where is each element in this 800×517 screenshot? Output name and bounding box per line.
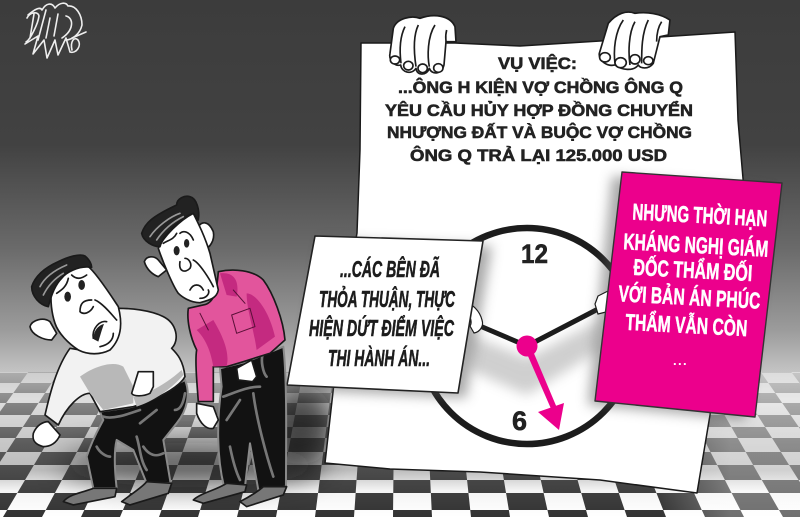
card text: ...	[673, 353, 688, 368]
shirt shading	[80, 364, 183, 410]
signature	[25, 3, 86, 58]
trousers	[218, 347, 286, 490]
hanging hand	[197, 403, 218, 429]
sheet text: case description: YÊU CẦU HỦY HỢP ĐỒNG CHUYỂN	[385, 101, 693, 120]
left ear	[144, 257, 167, 277]
eyes	[174, 246, 180, 255]
character: right man in pink shirt	[142, 196, 287, 507]
facial features	[57, 275, 117, 347]
hair streaks	[40, 265, 67, 295]
paper sheet	[325, 32, 744, 493]
shirt shading	[197, 273, 275, 367]
magenta hand with arrow	[516, 336, 564, 430]
sheet text: case description: ÔNG Q TRẢ LẠI 125.000 USD	[410, 146, 667, 165]
card text: THI HÀNH ÁN...	[328, 344, 430, 371]
hand on stomach	[132, 372, 153, 396]
character: left man in white shirt	[30, 255, 188, 505]
card text	[618, 197, 769, 368]
magenta card	[595, 172, 782, 417]
pointing glove on right hand	[595, 287, 617, 314]
card text	[309, 255, 455, 371]
face	[51, 266, 121, 354]
left clock hand	[480, 326, 527, 346]
open mouth	[94, 324, 104, 342]
icon: left hand gripping sheet	[390, 16, 456, 74]
eyes	[64, 292, 71, 302]
shoes	[63, 488, 117, 505]
clock ring	[419, 228, 635, 444]
sheet text: case description: ...ÔNG H KIỆN VỢ CHỒNG ÔNG Q	[398, 78, 683, 97]
card text: THẨM VẪN CÒN	[625, 307, 748, 341]
trouser folds	[223, 353, 273, 480]
hanging hand	[33, 422, 60, 447]
card text: ...CÁC BÊN ĐÃ	[340, 255, 440, 282]
facial features	[163, 232, 213, 298]
icon: right hand gripping sheet	[599, 12, 670, 69]
numeral 12: 12	[521, 239, 548, 269]
sheet shape	[325, 32, 744, 493]
numeral 6: 6	[512, 406, 527, 436]
card text: ĐỐC THẨM ĐỐI	[633, 253, 753, 286]
white shirt	[45, 308, 185, 425]
hair	[142, 196, 199, 247]
white card	[287, 236, 483, 393]
card text: HIỆN DỨT ĐIỂM VIỆC	[309, 314, 454, 341]
checkered floor	[0, 372, 800, 517]
hand on thigh	[237, 360, 257, 382]
shoes	[193, 483, 247, 503]
hair	[32, 255, 92, 307]
card shape	[595, 172, 782, 417]
sheet text: case description	[385, 54, 693, 165]
clock	[419, 228, 635, 444]
card text: THỎA THUẬN, THỰC	[319, 285, 455, 312]
pink shirt	[188, 270, 285, 402]
hand shadow	[470, 320, 600, 395]
ear	[30, 319, 57, 340]
right ear	[198, 223, 214, 250]
glove on left hand	[466, 304, 483, 333]
card shape	[287, 236, 483, 393]
trouser folds	[97, 393, 185, 470]
card shadows	[296, 176, 772, 420]
trousers	[87, 380, 188, 488]
sheet text: case description: VỤ VIỆC:	[498, 54, 577, 73]
shirt pocket	[200, 290, 255, 333]
sheet text: case description: NHƯỢNG ĐẤT VÀ BUỘC VỢ CHỒNG	[387, 123, 692, 142]
right clock hand	[527, 308, 600, 346]
hair streaks	[150, 213, 183, 240]
face	[158, 213, 218, 303]
